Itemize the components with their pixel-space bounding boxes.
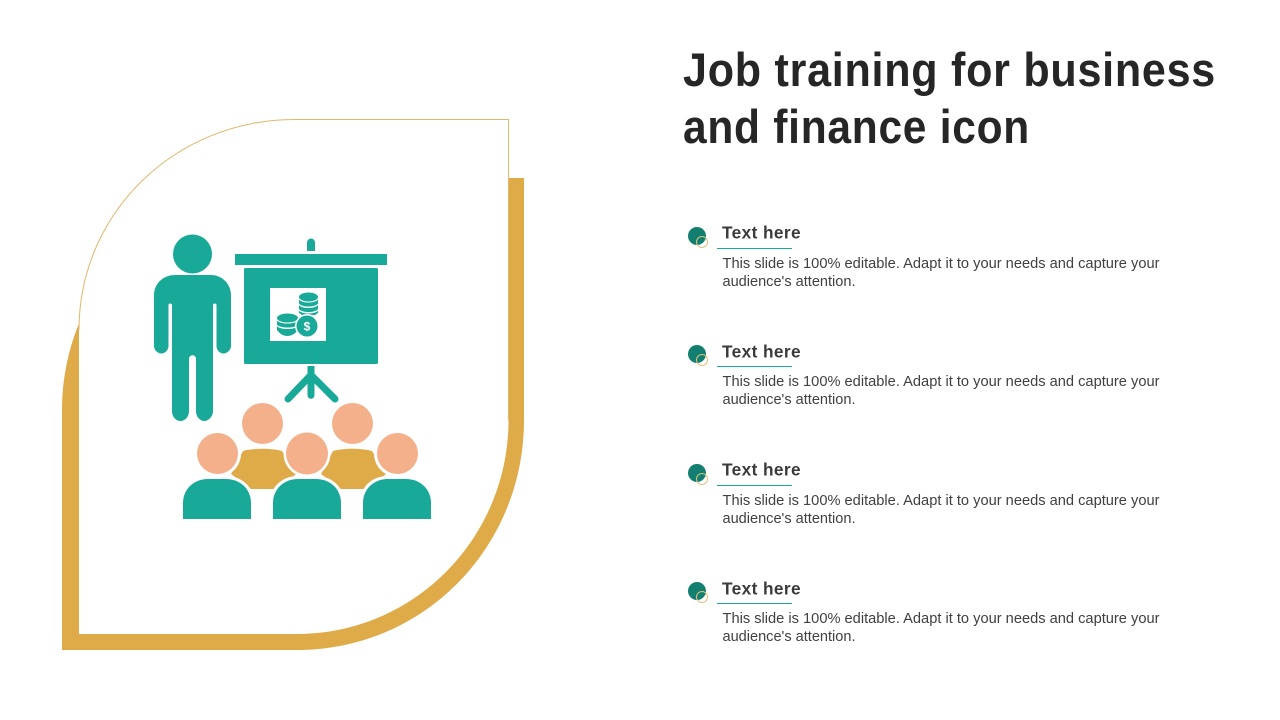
heading: Text here bbox=[722, 222, 801, 242]
gold leaf backing bbox=[62, 178, 524, 650]
panel: leaf frame bbox=[62, 120, 524, 650]
icon: trainer figure bbox=[154, 234, 231, 421]
icon: front row bodies bbox=[180, 476, 434, 519]
heading: Text here bbox=[722, 460, 801, 480]
list item 4 bbox=[688, 578, 1160, 645]
title bbox=[683, 43, 1216, 153]
body text: audience's attention. bbox=[722, 629, 856, 645]
body text: This slide is 100% editable. Adapt it to your needs and capture your bbox=[722, 611, 1160, 627]
body text: audience's attention. bbox=[722, 274, 856, 290]
bullet bbox=[688, 582, 708, 602]
body text bbox=[722, 493, 1160, 527]
bullet bbox=[688, 464, 708, 484]
icon: projection screen bbox=[235, 238, 387, 399]
icon: back row torsos bbox=[231, 449, 386, 489]
body text bbox=[722, 374, 1160, 408]
bullet bbox=[688, 227, 708, 248]
body text: This slide is 100% editable. Adapt it to your needs and capture your bbox=[722, 493, 1160, 509]
list item 3 bbox=[688, 460, 1160, 527]
body text: This slide is 100% editable. Adapt it to your needs and capture your bbox=[722, 256, 1160, 272]
icon: audience heads bbox=[194, 403, 421, 477]
body text bbox=[722, 256, 1160, 290]
white leaf with thin outline bbox=[79, 120, 508, 634]
body text: audience's attention. bbox=[722, 392, 856, 408]
title: and finance icon bbox=[683, 100, 1030, 153]
heading: Text here bbox=[722, 342, 801, 362]
list item 1 bbox=[688, 222, 1160, 290]
body text: audience's attention. bbox=[722, 511, 856, 527]
body text: This slide is 100% editable. Adapt it to your needs and capture your bbox=[722, 374, 1160, 390]
body text bbox=[722, 611, 1160, 645]
icon: job training presentation bbox=[154, 234, 434, 519]
bullet bbox=[688, 345, 708, 366]
list item 2 bbox=[688, 342, 1160, 408]
title: Job training for business bbox=[683, 43, 1216, 96]
icon: coins and dollar bbox=[270, 288, 326, 341]
heading: Text here bbox=[722, 578, 801, 598]
icon: coins and dollar: $ bbox=[304, 320, 311, 334]
